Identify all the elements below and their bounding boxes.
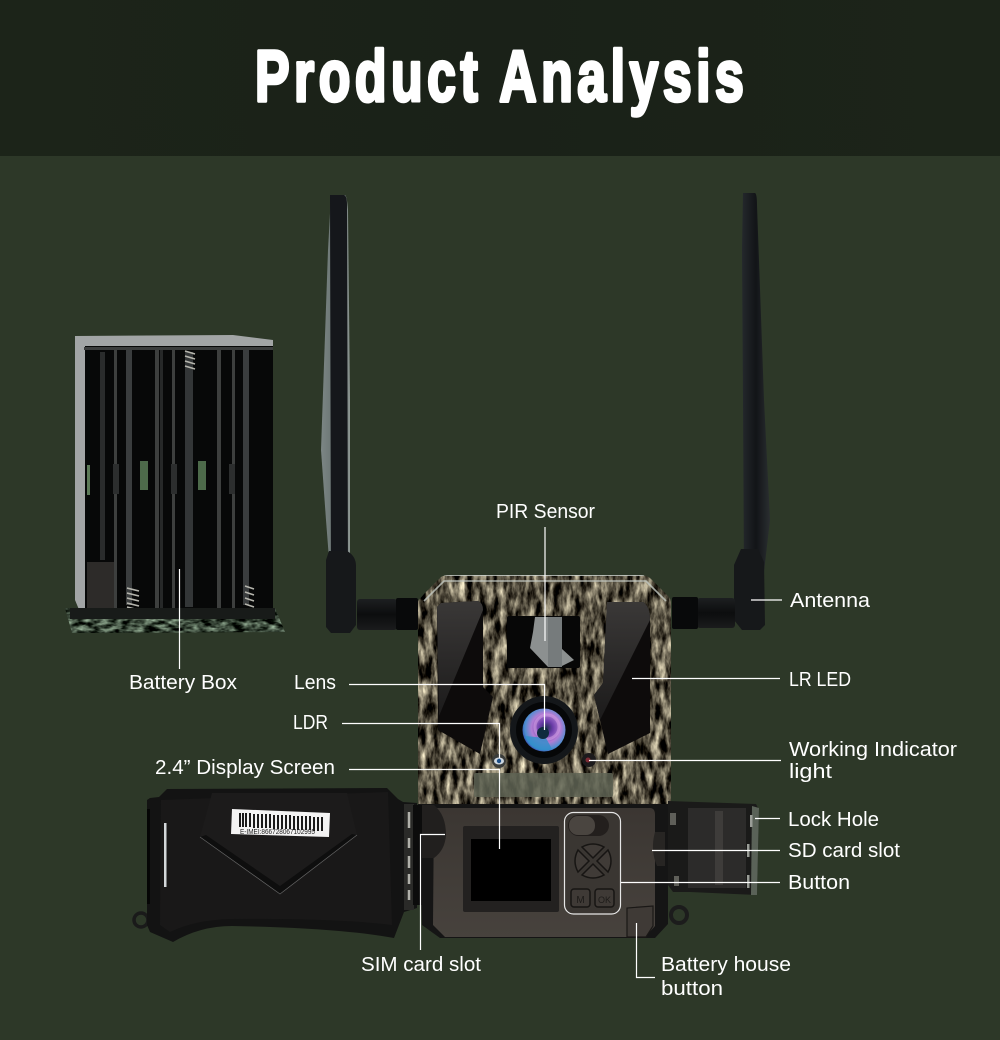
callout: Working Indicator light: light	[789, 761, 833, 783]
rear panel	[433, 808, 655, 937]
camo strip	[474, 773, 613, 797]
PIR sensor window	[507, 616, 580, 668]
callout: Working Indicator light: Working Indicator	[789, 739, 957, 761]
left antenna	[321, 195, 418, 633]
display screen	[471, 839, 551, 901]
callout: Battery Box	[129, 569, 237, 694]
IR panel right	[594, 602, 650, 754]
callout: SD card slot: SD card slot	[788, 840, 900, 862]
camo shell	[416, 573, 674, 809]
callout: Battery Box: Battery Box	[129, 672, 237, 694]
right antenna	[672, 193, 770, 630]
button panel	[564, 812, 620, 914]
button panel: OK	[598, 895, 611, 905]
battery springs	[127, 351, 254, 610]
open side door	[668, 801, 759, 895]
callout: Antenna: Antenna	[790, 590, 871, 612]
battery box base	[65, 608, 285, 633]
LDR	[492, 754, 506, 768]
working indicator light	[582, 753, 596, 767]
battery box shell	[75, 335, 273, 612]
callout: Battery house button: Battery house	[661, 954, 791, 976]
callout: PIR Sensor: PIR Sensor	[496, 501, 595, 523]
cover side slit	[164, 823, 166, 887]
direction pad	[575, 844, 611, 878]
mounting tab	[671, 907, 687, 923]
callout: Battery house button	[636, 923, 791, 1000]
SD slot cover	[653, 832, 665, 866]
SIM slot cover	[421, 805, 446, 858]
callout: LDR	[293, 712, 500, 758]
callout: Antenna	[751, 590, 871, 612]
callout: Lock Hole: Lock Hole	[788, 809, 879, 831]
header band	[0, 0, 1000, 156]
callout: Lens	[294, 672, 544, 730]
button panel: M	[576, 895, 585, 906]
open rear cover	[134, 788, 422, 942]
battery box	[65, 335, 285, 633]
IR panel left	[437, 601, 493, 754]
callout: LR LED: LR LED	[789, 669, 851, 691]
callout: Display Screen	[155, 757, 500, 849]
barcode label	[231, 809, 330, 837]
callout: Lens: Lens	[294, 672, 336, 694]
barcode label: E-IMEI:866728067102995	[240, 829, 315, 836]
camera front body	[416, 573, 674, 809]
camera lower body	[418, 804, 687, 938]
callout: SIM card slot: SIM card slot	[361, 954, 481, 976]
callout: Working Indicator light	[589, 739, 957, 783]
lens	[510, 696, 578, 764]
battery channel highlights	[87, 350, 249, 610]
callout: Button: Button	[788, 872, 850, 894]
cover hinge	[404, 804, 414, 910]
callout: PIR Sensor	[496, 501, 595, 641]
battery house button	[627, 906, 653, 937]
callout: SIM card slot	[361, 834, 481, 976]
callout: LDR: LDR	[293, 712, 328, 734]
battery contact block	[87, 562, 114, 612]
display bezel	[463, 826, 559, 912]
title: Product Analysis	[255, 37, 744, 117]
callout: Display Screen: 2.4” Display Screen	[155, 757, 335, 779]
callout: Battery house button: button	[661, 978, 723, 1000]
chevron recess	[200, 793, 357, 894]
